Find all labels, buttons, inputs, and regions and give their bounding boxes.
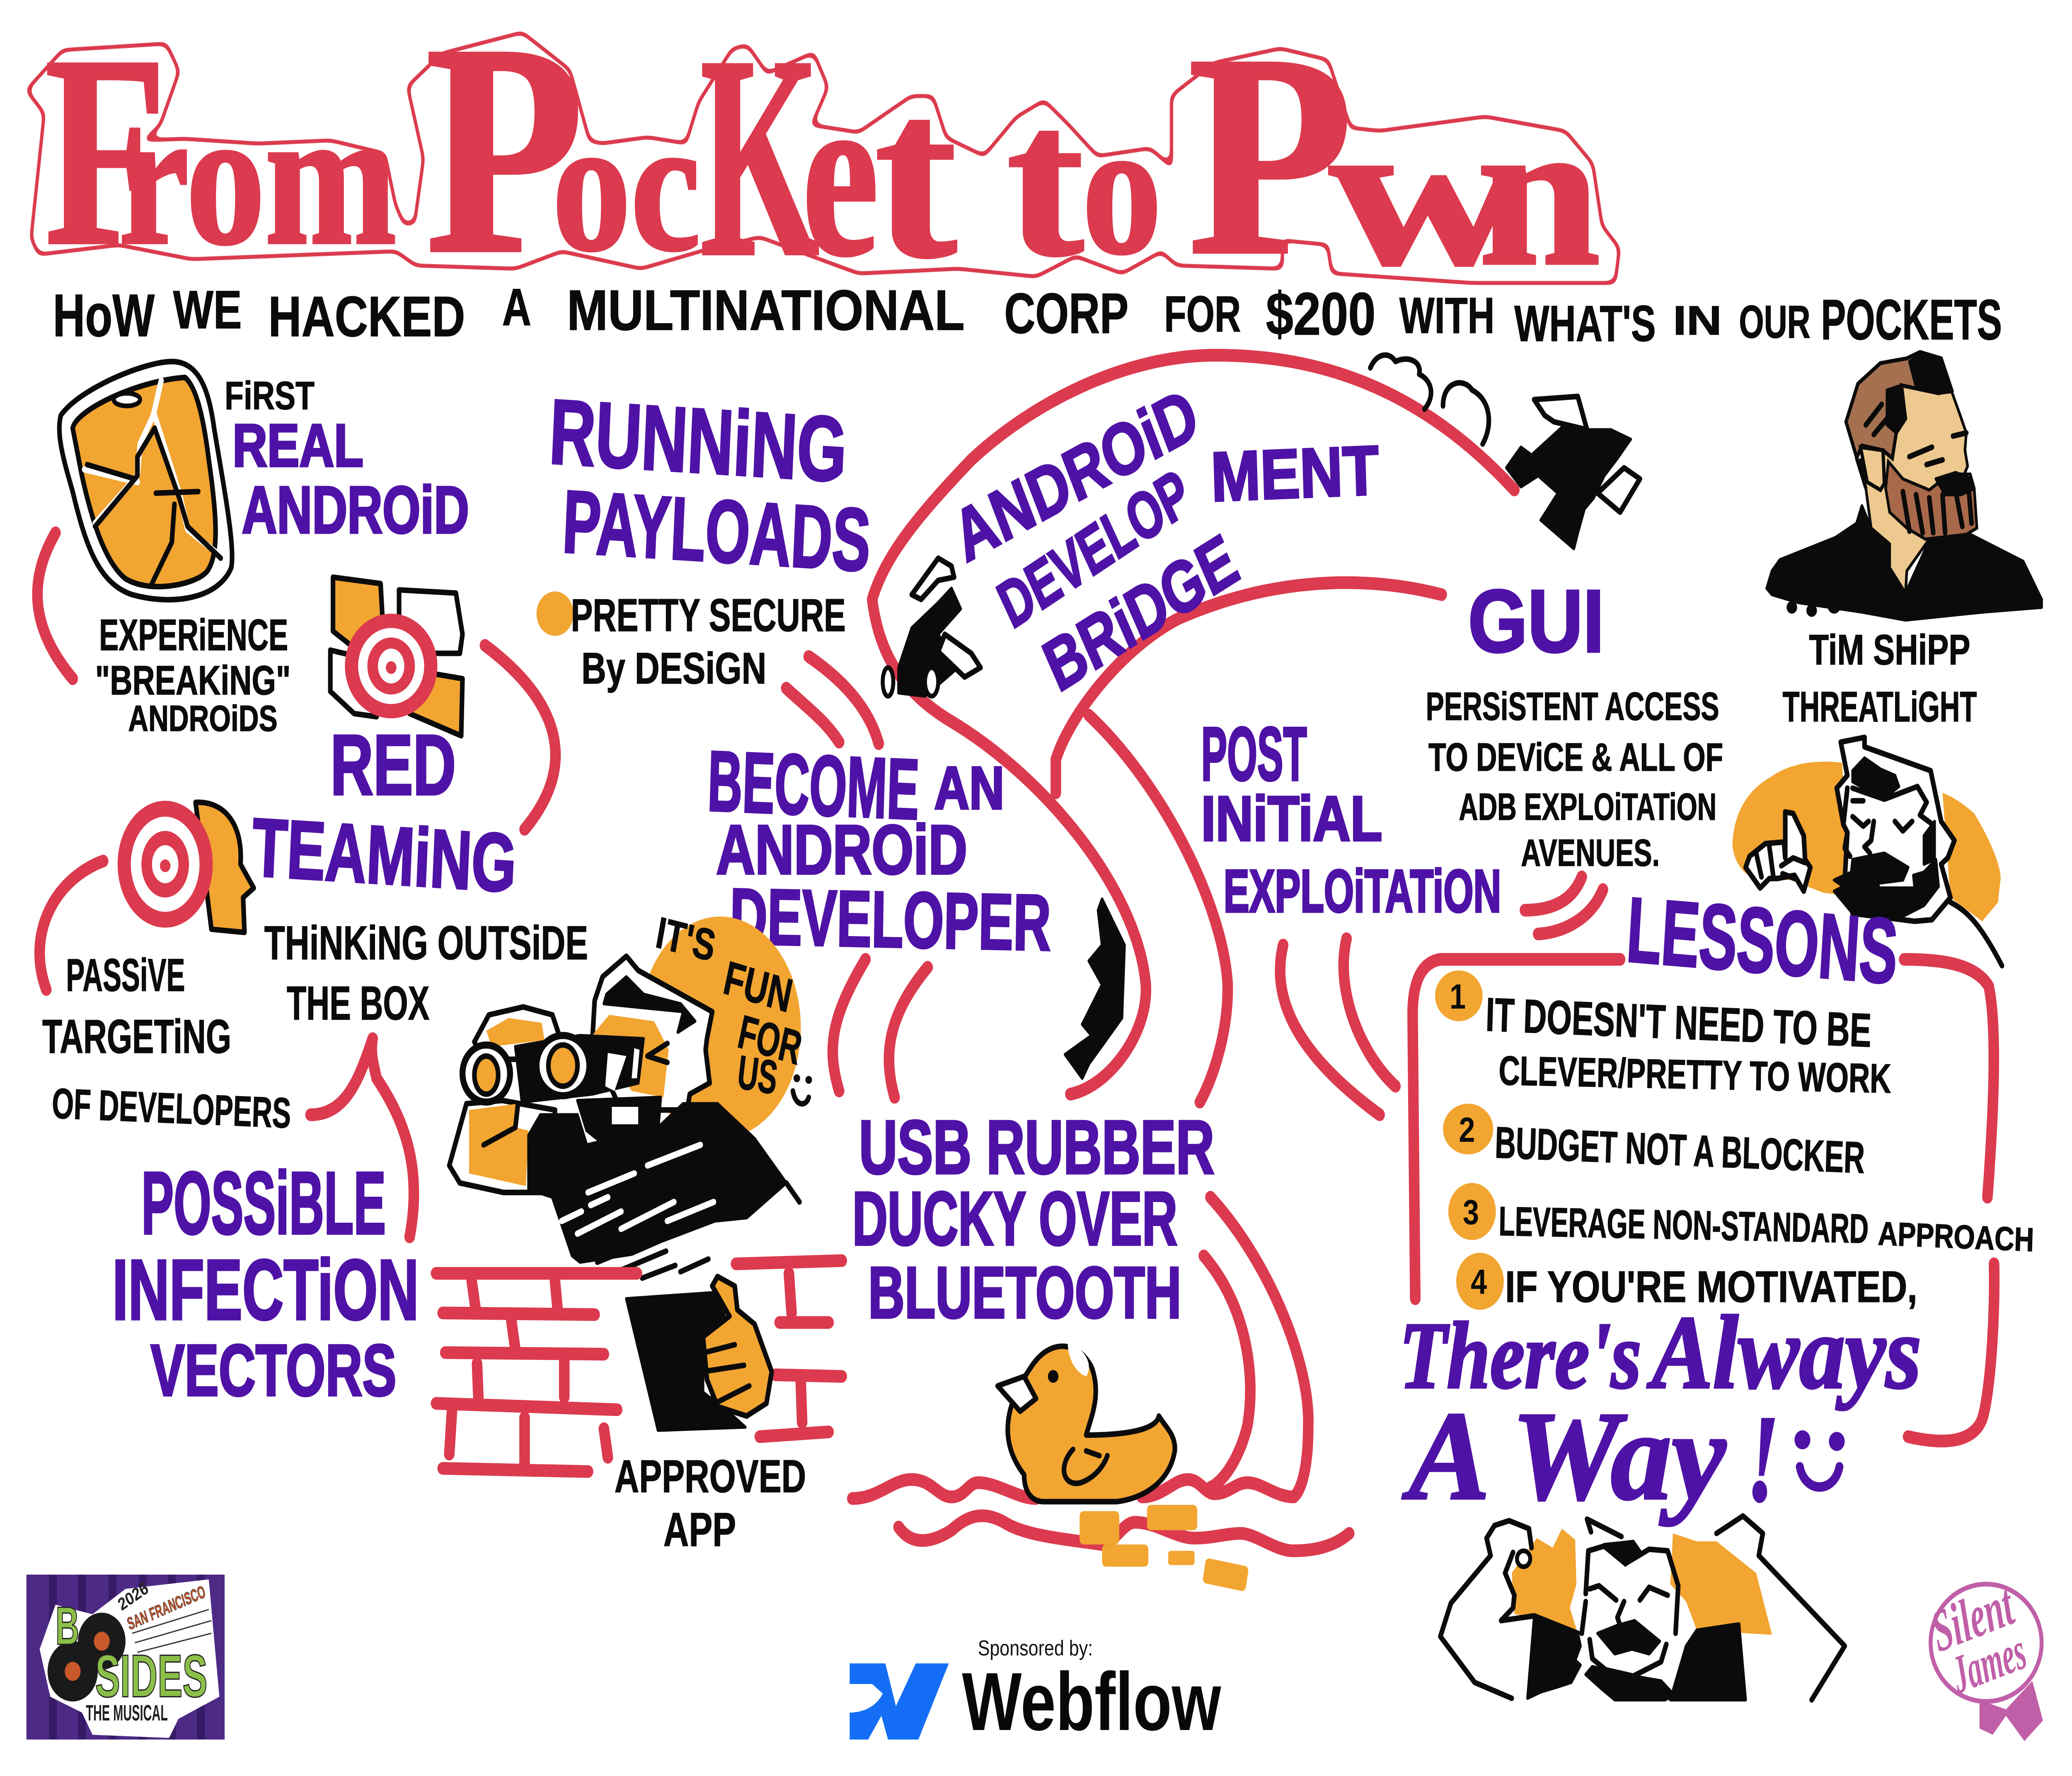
heading [707,733,1051,967]
lesson 3 [1448,1183,2034,1258]
logo: Silent James [1925,1570,2043,1741]
title: From Pocket to Pwn [29,0,1617,316]
text: passive targeting of developers: OF DEVELOPERS [51,1080,292,1137]
connector ticks [1280,939,1395,1115]
heading [852,1105,1214,1333]
text: thinking outside the box: THE BOX [287,977,429,1030]
speech: it's fun for us [652,907,812,1105]
heading: EXPLOiTATiON [1224,858,1501,925]
title: From Pocket to Pwn: F [45,0,167,302]
water reflection blocks [1080,1505,1249,1592]
text: persistent access [1426,684,1723,874]
icon: smiley [1794,1430,1845,1487]
orange backdrop [639,917,801,1139]
heading: RUNNiNG [547,380,849,501]
arc: big bridge [872,355,1514,1094]
title: From Pocket to Pwn: t [1007,61,1086,300]
subtitle: HoW [53,282,155,349]
heading: POSSiBLE [141,1153,386,1253]
callout: there's always a way: Always [1647,1295,1921,1411]
subtitle: WHAT'S [1514,295,1656,352]
heading: AN [934,755,1004,822]
box frame [1413,959,1994,1441]
logo: Silent James: Silent [1925,1570,2021,1665]
text: experience breaking androids: "BREAKiNG" [95,658,291,704]
title: From Pocket to Pwn: oc [552,80,700,290]
title: From Pocket to Pwn: P [1188,0,1353,315]
panel: red teaming [40,577,555,1137]
text: experience breaking androids: ANDROiDS [128,699,278,739]
lesson 2: 2 [1459,1111,1475,1149]
speech: it's fun for us: FUN [719,951,797,1023]
icon: portrait of Tim Shipp [1767,352,2042,620]
lesson 3: LEVERAGE NON-STANDARD [1498,1198,1869,1252]
text: approved app: APP [663,1503,736,1556]
heading: android development bridge: BRiDGE [1033,519,1248,707]
heading: android development bridge: DEVELOP [988,456,1201,642]
subtitle: FOR [1164,286,1241,342]
icon: climbing figure [883,558,980,696]
logo: BSides: 2026 [115,1578,151,1614]
text: approved app: APPROVED [615,1451,806,1502]
arc [485,646,555,829]
brick wall [436,1261,842,1471]
icon: cheering man [1440,1516,1845,1700]
heading: GUI [1468,571,1604,670]
heading: android development bridge: ANDROiD [943,373,1208,577]
arc: post exploitation [1089,715,1228,1102]
heading: ANDROiD [716,811,967,888]
icon: target on head [118,801,254,932]
sponsored label: Sponsored by: [978,1637,1093,1660]
text: android: ANDROiD [242,473,469,547]
icon: phone in hand [626,1277,772,1430]
lesson 3: 3 [1463,1193,1479,1232]
heading: INiTiAL [1201,783,1382,854]
lesson 3: APPROACH [1878,1215,2034,1258]
heading: DUCKY OVER [852,1176,1177,1261]
panel: possible infection vectors [112,917,588,1411]
lesson 4: 4 [1471,1263,1487,1302]
arcs [1204,1197,1308,1497]
subtitle: WE [173,280,242,340]
text: real: REAL [232,412,363,479]
head [592,956,712,1110]
panel: lessons [1399,737,2034,1700]
icon: webflow logo [850,1663,949,1740]
text: passive targeting of developers: PASSiVE [66,950,185,1001]
subtitle: OUR [1739,296,1811,348]
icon: rubber duck [998,1341,1175,1502]
subtitle: $200 [1266,281,1376,348]
text: thinking outside the box [264,917,588,1030]
icon: man with finger raised [1732,737,2002,966]
logo: BSides: B [56,1596,79,1656]
subtitle [53,278,2002,352]
panel: usb rubber ducky [852,1105,1349,1592]
heading: lessons: LESSONS [1624,878,1900,1003]
panel: speaker [1767,352,2042,731]
text: first: FiRST [225,373,315,418]
icon: dust clouds [1370,355,1489,444]
lesson 4: IF YOU'RE MOTIVATED, [1505,1262,1917,1311]
arrow [310,1039,414,1237]
arc [40,861,103,990]
text: passive targeting of developers [42,950,292,1137]
heading: DEVELOPER [729,872,1051,967]
text: thinking outside the box: THiNKiNG OUTSiDE [264,917,588,970]
lesson 2 [1443,1103,1866,1183]
speech: it's fun for us: IT'S [652,907,719,971]
title: From Pocket to Pwn: e [802,42,879,305]
icon: cracked phone [59,362,232,600]
logo: Silent James: James [1946,1620,2032,1705]
lesson 1 [1435,970,1891,1102]
heading: VECTORS [151,1330,397,1411]
speech: it's fun for us: US [735,1045,780,1105]
text: approved app [615,1451,806,1556]
heading: PAYLOADS [561,472,873,590]
heading: BLUETOOTH [868,1252,1181,1333]
lesson 2: BUDGET NOT A BLOCKER [1494,1118,1866,1183]
subtitle: IN [1673,298,1722,344]
panel: android development bridge arcs [872,355,1640,1102]
subtitle: POCKETS [1821,288,2002,351]
icon: running figure [1506,397,1640,549]
shirt [529,1103,799,1278]
logo: BSides [27,1575,225,1740]
arm [449,1007,560,1193]
title: From Pocket to Pwn: n [1479,77,1600,309]
callout: there's always a way [1399,1295,1921,1527]
panel: gui [1426,571,1723,934]
speech: it's fun for us: FOR [734,1005,806,1075]
text: persistent access: ADB EXPLOiTATiON [1459,785,1716,828]
sponsor: Webflow [850,1637,1221,1747]
text: pretty secure by design: By DESiGN [581,644,766,693]
subtitle: A [502,278,531,336]
heading: USB RUBBER [859,1105,1214,1190]
text: teaming: TEAMiNG [250,801,518,910]
heading: BECOME [707,733,920,837]
text: red: RED [330,717,456,813]
heading: android development bridge [943,373,1380,707]
lesson 1: IT DOESN'T NEED TO BE [1485,988,1872,1057]
callout: there's always a way: ! [1747,1390,1779,1527]
connector ticks [786,656,879,744]
heading: INFECTiON [112,1242,419,1338]
panel: become an android developer [707,733,1051,1097]
connector ticks [1525,877,1603,934]
wordmark: Webflow [962,1655,1221,1747]
callout: there's always a way: There's [1399,1303,1641,1408]
binoculars [462,1036,667,1102]
icon: hanging figure [1065,899,1125,1078]
arc [37,533,73,679]
text: experience breaking androids [95,610,291,739]
heading [112,1153,419,1411]
heading: android development bridge: MENT [1210,431,1380,516]
water [852,1479,1349,1551]
title: From Pocket to Pwn: t [875,44,959,307]
text: name: TiM SHiPP [1809,626,1970,674]
lesson 1: CLEVER/PRETTY TO WORK [1498,1048,1891,1102]
bullet [537,591,574,636]
title: From Pocket to Pwn: w [1329,77,1525,309]
text: persistent access: TO DEViCE & ALL OF [1428,735,1723,779]
callout: there's always a way: A Way [1401,1386,1727,1526]
text: pretty secure by design: PRETTY SECURE [571,590,846,641]
icon: target with squares [330,577,462,736]
title: From Pocket to Pwn: o [1082,83,1162,293]
logo: BSides: THE MUSICAL [86,1701,168,1725]
logo: BSides: SAN FRANCISCO [125,1582,208,1634]
panel: running payloads [537,380,879,744]
illustration: man with binoculars behind brick wall [436,907,842,1556]
heading: POST [1201,711,1307,796]
text: company: THREATLiGHT [1783,683,1977,731]
heading [547,380,873,590]
panel: first real android [37,362,469,739]
panel: post initial exploitation [1201,711,1501,1115]
text: passive targeting of developers: TARGETiNG [42,1010,231,1063]
lesson 1: 1 [1450,978,1466,1016]
subtitle: CORP [1004,281,1128,345]
subtitle: MULTINATIONAL [567,278,965,342]
text: persistent access: PERSiSTENT ACCESS [1426,684,1719,728]
text: experience breaking androids: EXPERiENCE [99,610,288,660]
title: From Pocket to Pwn: K [700,0,820,316]
subtitle: WITH [1399,287,1495,344]
arc: gui [1056,583,1442,793]
logo: BSides: SIDES [95,1643,208,1710]
text: persistent access: AVENUES. [1521,831,1660,874]
subtitle: HACKED [268,284,465,348]
title: From Pocket to Pwn: rom [119,70,397,285]
beard [577,1097,661,1153]
heading [1201,711,1501,925]
connector ticks [833,959,928,1097]
text: pretty secure by design [571,590,846,693]
